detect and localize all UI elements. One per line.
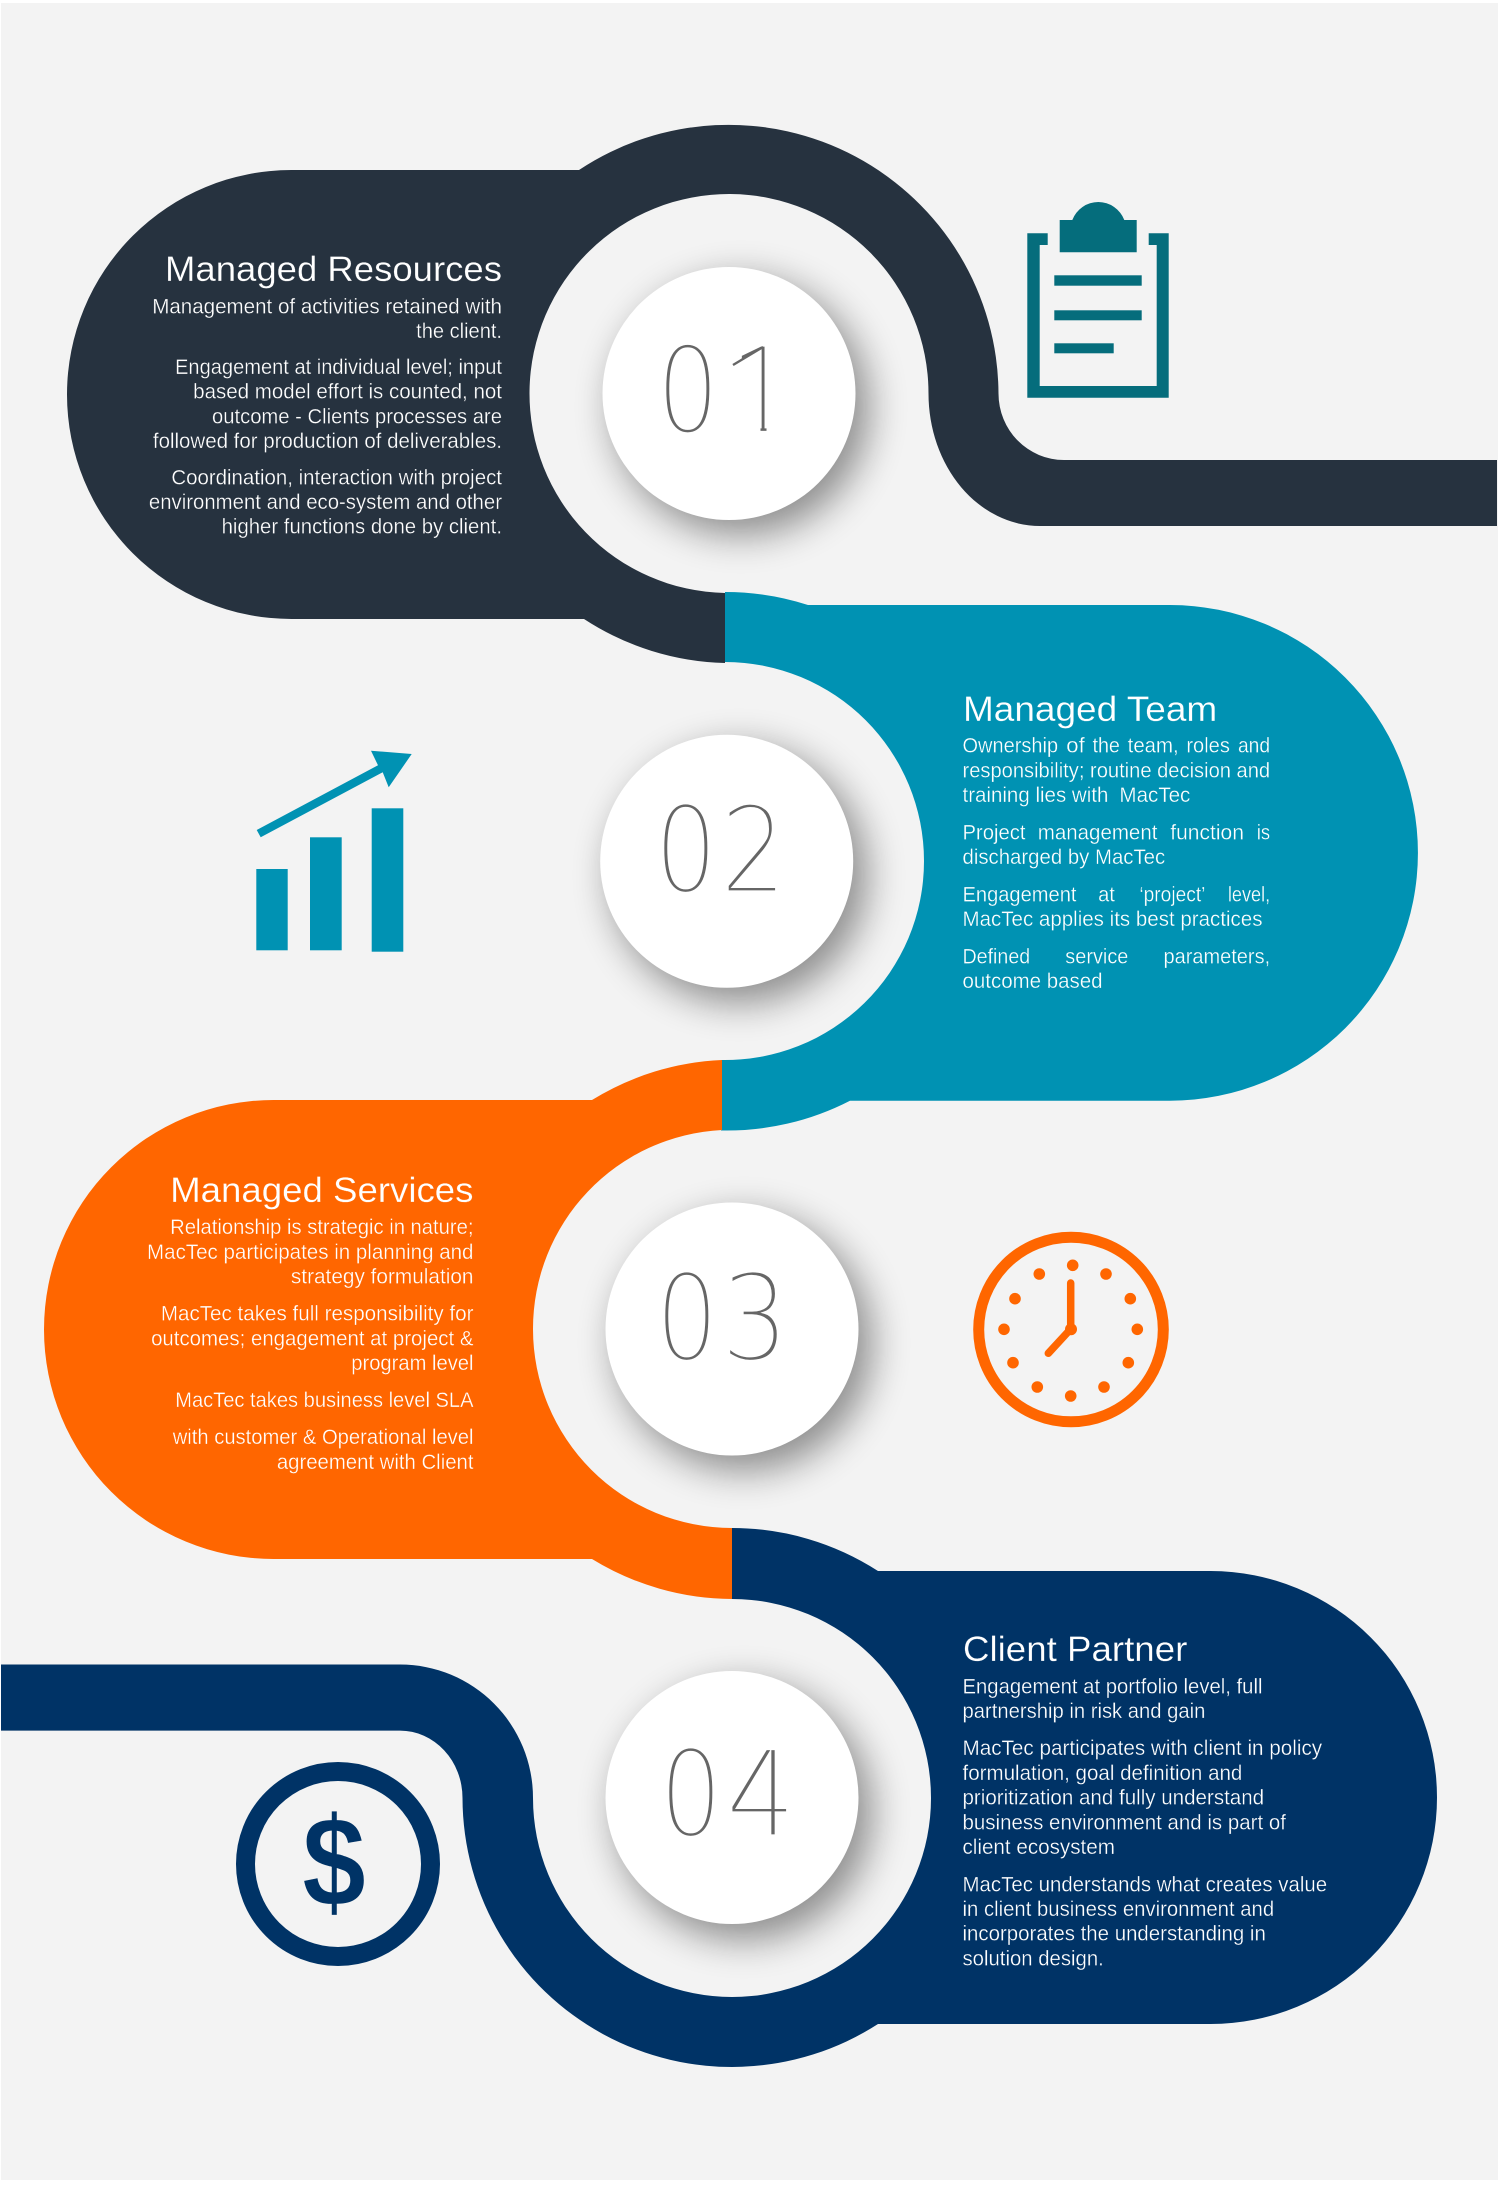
number badge 04 — [606, 1671, 872, 1940]
body text: strategy formulation — [291, 1266, 473, 1289]
body text: Engagement — [962, 883, 1077, 906]
body text: partnership in risk and gain — [962, 1700, 1205, 1723]
body text: Management of activities retained with — [152, 295, 502, 318]
body text: service — [1065, 945, 1128, 968]
body text: the client. — [416, 320, 502, 343]
ribbon shape 3 — [44, 1060, 732, 1599]
body text: solution design. — [962, 1947, 1104, 1970]
body text: Coordination, interaction with project — [171, 466, 502, 489]
panel: 01 managed resources — [67, 125, 1497, 663]
body text: program level — [351, 1352, 473, 1375]
number badge 03 — [606, 1202, 872, 1471]
icon: clipboard — [1027, 202, 1169, 398]
heading: Managed Resources — [165, 250, 502, 289]
body text: outcome based — [962, 970, 1103, 993]
number badge 01: 0 — [656, 323, 720, 461]
ribbon shape 2 — [721, 592, 1418, 1131]
body text: discharged by MacTec — [962, 846, 1165, 869]
body text: Engagement at individual level; input — [175, 356, 502, 379]
body text: MacTec applies its best practices — [962, 908, 1262, 931]
number badge 02 — [600, 735, 867, 1003]
icon: dollar coin: $ — [302, 1791, 366, 1934]
body text: based model effort is counted, not — [193, 381, 502, 404]
body text: prioritization and fully understand — [962, 1787, 1264, 1810]
number badge 03: 3 — [721, 1250, 789, 1388]
body text: Defined — [962, 945, 1030, 968]
body text: ‘project’ — [1139, 883, 1205, 906]
body text: team, — [1128, 735, 1179, 758]
body text: Engagement at portfolio level, full — [962, 1675, 1262, 1698]
number badge 01 — [602, 267, 869, 535]
body text: environment and eco-system and other — [149, 491, 502, 514]
body text — [962, 735, 1270, 993]
body text: parameters, — [1163, 945, 1270, 968]
body text: business environment and is part of — [962, 1811, 1286, 1834]
body text: MacTec understands what creates value — [962, 1873, 1327, 1896]
body text: MacTec participates with client in policy — [962, 1737, 1323, 1760]
body text: MacTec participates in planning and — [147, 1241, 473, 1264]
body text: higher functions done by client. — [222, 516, 502, 539]
body text: agreement with Client — [277, 1451, 474, 1474]
body text: the — [1092, 735, 1120, 758]
body text: management — [1038, 821, 1158, 844]
heading: Managed Services — [170, 1171, 473, 1210]
number badge 02: 0 — [654, 782, 718, 920]
body text: outcome - Clients processes are — [212, 405, 502, 428]
body text — [149, 295, 502, 539]
number badge 03: 0 — [656, 1250, 718, 1388]
body text: Ownership — [962, 735, 1058, 758]
body text: at — [1098, 883, 1115, 906]
body text: with customer & Operational level — [172, 1426, 473, 1449]
body text — [147, 1216, 474, 1474]
body text: and — [1238, 735, 1270, 758]
icon: dollar coin — [246, 1772, 430, 1956]
body text: roles — [1186, 735, 1230, 758]
panel: 02 managed team — [721, 592, 1418, 1131]
number badge 01: 1 — [730, 323, 793, 461]
body text — [962, 1675, 1327, 1970]
body text: followed for production of deliverables. — [153, 430, 502, 453]
body text: is — [1257, 821, 1270, 844]
body text: function — [1170, 821, 1244, 844]
body text: MacTec takes business level SLA — [175, 1389, 473, 1412]
body text: Relationship is strategic in nature; — [170, 1216, 473, 1239]
body text: responsibility; routine decision and — [962, 759, 1270, 782]
icon: clock — [979, 1237, 1163, 1422]
body text: outcomes; engagement at project & — [151, 1328, 473, 1351]
number badge 04: 0 — [660, 1726, 722, 1864]
heading: Client Partner — [963, 1630, 1188, 1669]
body text: MacTec — [1119, 784, 1190, 807]
number badge 04: 4 — [726, 1726, 796, 1864]
number badge 02: 2 — [720, 782, 786, 920]
body text: client ecosystem — [962, 1836, 1115, 1859]
body text: training lies with — [962, 784, 1108, 807]
ribbon shape 1 — [67, 125, 1497, 663]
body text: Project — [962, 821, 1026, 844]
body text: of — [1066, 735, 1085, 758]
heading: Managed Team — [963, 690, 1217, 729]
body text: MacTec takes full responsibility for — [161, 1303, 473, 1326]
panel: 04 client partner — [1, 1528, 1437, 2067]
panel: 03 managed services — [44, 1060, 732, 1599]
body text: formulation, goal definition and — [962, 1762, 1242, 1785]
body text: incorporates the understanding in — [962, 1923, 1266, 1946]
icon: rising bar chart — [256, 751, 412, 952]
ribbon shape 4 — [1, 1528, 1437, 2067]
body text: level, — [1228, 883, 1270, 906]
body text: in client business environment and — [962, 1898, 1274, 1921]
